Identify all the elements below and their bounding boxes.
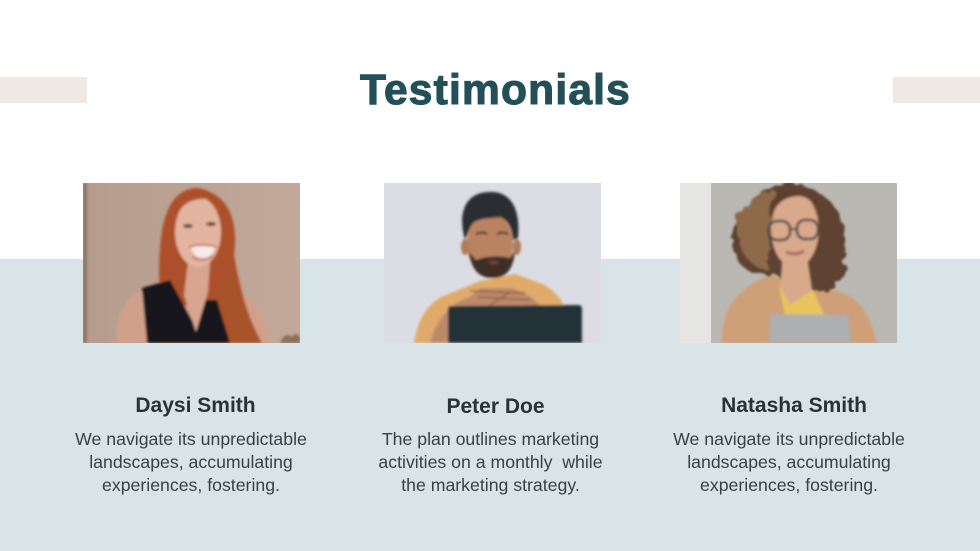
testimonial: Daysi Smith: [75, 394, 307, 495]
name: Peter Doe: Peter Doe: [446, 395, 545, 418]
photo: Natasha Smith: [680, 183, 897, 343]
name: Daysi Smith: Daysi Smith: [135, 394, 256, 417]
quote: Natasha Smith: experiences, fostering.: [700, 475, 878, 495]
pale blue lower background panel: [0, 259, 980, 551]
quote: Peter Doe: The plan outlines marketing: [382, 429, 599, 449]
quote: Daysi Smith: experiences, fostering.: [102, 475, 280, 495]
quote: Daysi Smith: [75, 429, 307, 495]
quote: Natasha Smith: We navigate its unpredictable: [673, 429, 905, 449]
curly hair: [732, 184, 846, 292]
left decorative beige bar: [0, 77, 87, 103]
quote: Peter Doe: [378, 429, 603, 495]
quote: Natasha Smith: [673, 429, 905, 495]
photo: Peter Doe: [384, 183, 601, 343]
quote: Peter Doe: activities on a monthly while: [378, 452, 603, 472]
quote: Daysi Smith: landscapes, accumulating: [89, 452, 293, 472]
photo: Daysi Smith: [83, 183, 300, 343]
title: Testimonials: [360, 67, 631, 114]
testimonial: Natasha Smith: [673, 394, 905, 495]
testimonial: Peter Doe: [378, 395, 603, 495]
quote: Natasha Smith: landscapes, accumulating: [687, 452, 891, 472]
quote: Peter Doe: the marketing strategy.: [401, 475, 580, 495]
right decorative beige bar: [893, 77, 980, 103]
name: Natasha Smith: Natasha Smith: [721, 394, 867, 417]
quote: Daysi Smith: We navigate its unpredictable: [75, 429, 307, 449]
